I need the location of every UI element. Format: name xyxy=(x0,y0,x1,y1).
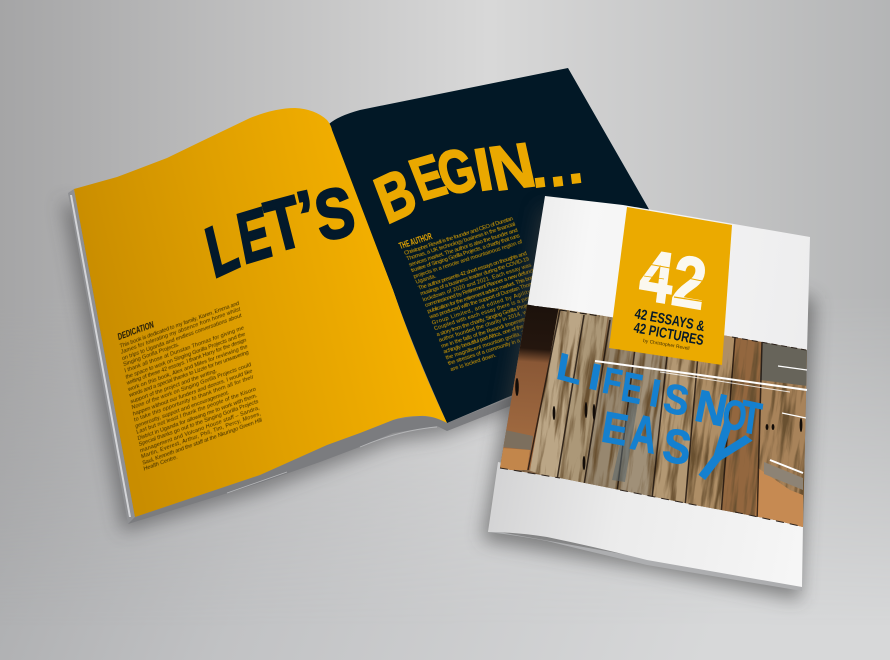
text block: the author: The author presents 42 short essays on thoughts and xyxy=(417,251,528,292)
heading: dedication: DEDICATION xyxy=(117,319,155,342)
painted words: LIFE IS NOT: F xyxy=(599,360,625,404)
painted words: LIFE IS NOT: E xyxy=(619,363,646,413)
text block: dedication: Martin, Everest, Arthur, Phil, Tim, Percy, Moses, xyxy=(141,411,262,460)
open magazine xyxy=(62,68,662,532)
text block: the author: commissioned by Retirement Planner a new defunct xyxy=(424,268,535,309)
yellow title panel: 42 PICTURES xyxy=(632,320,705,349)
page stack left edge xyxy=(68,189,135,524)
knots xyxy=(515,378,802,470)
rocks bottom left xyxy=(500,448,530,470)
text block: dedication: management and Volcano House staff – Sandra, xyxy=(140,405,261,454)
cover page stack xyxy=(488,530,802,591)
stone patch top right xyxy=(760,342,808,386)
painted words: LIFE IS NOT xyxy=(554,345,764,445)
painted words: EASY: Y xyxy=(678,405,764,502)
heading: LET'S xyxy=(199,172,361,293)
heading: LET'S: S xyxy=(309,172,361,257)
text block: the author: Christopher Revell is the founder and CEO of Dunstan xyxy=(404,216,514,257)
torn edge scratches xyxy=(500,305,807,526)
text block: the author: was produced with the support of Dunstan Thomas xyxy=(428,280,540,321)
magazine shadow xyxy=(62,200,530,532)
page stack bottom edge xyxy=(128,397,518,524)
cover sheet bottom white xyxy=(488,462,803,587)
painted words: EASY xyxy=(598,402,764,502)
text block: the author: the stresses of a community in a pandemic when xyxy=(447,326,558,367)
text block: the author: author founded the charity in 2014, with a trek xyxy=(438,303,549,344)
text block: the author: publication for the retirement advice market. This book xyxy=(427,274,537,315)
left page: yellow xyxy=(74,108,447,517)
text block: dedication: James for tolerating my absence from home whilst xyxy=(120,307,241,356)
cover title: 42 ESSAYS & xyxy=(633,306,706,335)
text block: the author: projects in a remote and mountainous region of xyxy=(413,239,524,280)
painted words: EASY: A xyxy=(627,403,661,465)
heading: BEGIN...: G xyxy=(429,136,484,208)
heading: LET'S: T xyxy=(258,180,310,268)
text block: dedication: District in Uganda for allowing me to work with them. xyxy=(137,393,258,442)
text block: dedication: the space to work on Singing Gorilla Projects and the xyxy=(125,331,246,381)
painted words: LIFE IS NOT: N xyxy=(691,381,731,437)
text block: the author: are is locked down. xyxy=(450,352,498,373)
text block: dedication: Last but not least I thank the people of the Kisoro xyxy=(136,387,257,436)
yellow title panel xyxy=(609,207,732,365)
page edge highlights xyxy=(227,427,437,493)
text block: dedication: work on this book, Alex and Miles for reviewing the xyxy=(127,344,248,393)
text block: dedication: None of the work on Singing Gorilla Projects could xyxy=(131,362,252,411)
plank: dark left xyxy=(500,306,558,470)
heading: LET'S: L xyxy=(199,204,245,293)
text block: dedication: Saul, Kenneth and the staff at the Nkuringo Green Hill xyxy=(142,417,262,467)
heading: BEGIN...: . xyxy=(563,132,586,195)
painted words: LIFE IS NOT: L xyxy=(554,345,585,393)
painted words: LIFE IS NOT: T xyxy=(738,392,764,445)
painted words: LIFE IS NOT: I xyxy=(647,371,664,415)
text block: the author: the magnificent mountain gorilla. The book tells xyxy=(445,320,556,361)
text block: the author: Group Limited, and edited by AgilityPR. xyxy=(431,286,542,326)
plank seams xyxy=(528,310,762,522)
text block: the author: a story from the charity, Singing Gorilla Projects. The xyxy=(436,297,546,338)
grey log left xyxy=(502,430,533,450)
heading: LET'S: ’ xyxy=(290,175,325,255)
text block: dedication: to take this opportunity to thank them all for their xyxy=(134,374,254,424)
painted words: EASY: S xyxy=(659,419,694,476)
text block: the author: services market. The author is also the founder and xyxy=(408,228,519,268)
text block: the author: Thomas, a UK technology business in the financial xyxy=(406,222,516,263)
heading: the author: THE AUTHOR xyxy=(398,231,434,251)
heading: LET'S: E xyxy=(232,192,277,279)
heading: BEGIN...: N xyxy=(483,130,541,204)
text block: dedication: writing of these 42 essays. I thank Harry for the design xyxy=(125,337,247,387)
heading: BEGIN...: . xyxy=(545,135,568,198)
cover shadow xyxy=(482,205,815,600)
text block: the author xyxy=(398,206,561,374)
cover sheet top white xyxy=(527,196,810,352)
heading: BEGIN...: . xyxy=(527,136,550,199)
byline: by Christopher Revell xyxy=(643,338,690,352)
text block: dedication: support of the project and the writing. xyxy=(130,368,218,405)
text block: dedication: Health Centre. xyxy=(143,454,179,473)
grey log right xyxy=(764,462,803,490)
text block: the author: trustee of Singing Gorilla Projects, a charity that runs xyxy=(410,233,521,274)
heading: BEGIN...: E xyxy=(402,143,455,214)
wood grain xyxy=(522,306,807,527)
planks xyxy=(528,308,582,478)
text block: the author: me in the falls of the Rwandi Impenetrable forest, xyxy=(440,309,551,350)
painted words: LIFE IS NOT: I xyxy=(586,356,604,399)
text block: the author: Coupled with each essay there is a personal xyxy=(433,291,544,332)
booklet cover xyxy=(473,196,825,609)
text block: dedication: This book is dedicated to my family, Karen, Emma and xyxy=(119,301,240,350)
right page: dark xyxy=(329,68,662,423)
text block: the author: Uganda. xyxy=(415,274,438,286)
text block: dedication: happen without our funders and donors. I would like xyxy=(132,368,253,417)
heading: BEGIN...: B xyxy=(366,154,425,238)
text block: dedication: words and a special thanks to Lizzie for her unwavering xyxy=(128,350,249,399)
blue-grey stripe on plank xyxy=(612,400,638,482)
text block: the author: musings of a business leader during the COVID-19 xyxy=(420,257,530,297)
text block: dedication: generosity, support and encouragement. xyxy=(135,390,230,430)
stencil rubs on 42 xyxy=(644,264,706,302)
text block: dedication: Singing Gorilla Projects. xyxy=(123,342,180,368)
text block: the author: achingly beautiful part Africa, one of the last homes of xyxy=(443,315,554,356)
text block: dedication: on trips to Uganda and endless conversations about xyxy=(122,313,243,362)
photo: weathered wooden planks xyxy=(500,305,807,527)
heading: BEGIN...: I xyxy=(469,135,498,204)
number 42: 42 xyxy=(635,235,711,325)
rocks bottom right xyxy=(755,468,803,530)
painted words: EASY: E xyxy=(598,402,632,455)
text block: dedication: I thank all those at Dunstan Thomas for giving me xyxy=(124,325,245,375)
text block: dedication xyxy=(116,289,264,473)
painted words: LIFE IS NOT: S xyxy=(661,375,692,426)
heading: BEGIN... xyxy=(366,130,586,238)
painted words: LIFE IS NOT: O xyxy=(720,390,750,441)
text block: dedication: Special thanks go out to the Singing Gorilla Projects xyxy=(138,399,259,448)
text block: the author: lockdown of 2020 and 2021. Each essay was xyxy=(422,262,533,303)
